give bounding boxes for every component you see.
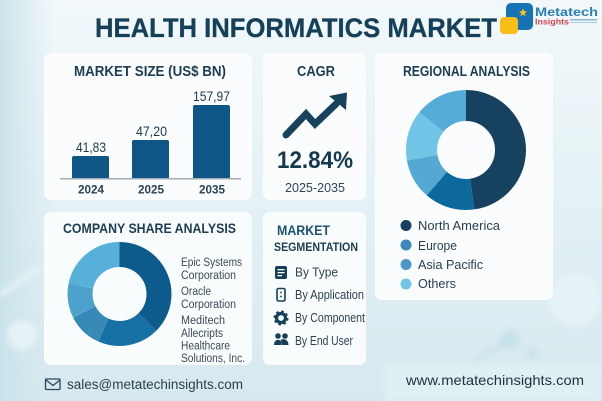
icon: by end user bbox=[274, 333, 288, 345]
label: by application: By Application bbox=[295, 288, 364, 302]
heading: CAGR: CAGR bbox=[297, 64, 335, 80]
icon: arrow head bbox=[329, 92, 347, 110]
legend: regions: Others bbox=[418, 276, 456, 291]
donut: regional analysis bbox=[422, 106, 510, 194]
bar chart: market size: 2025 bbox=[138, 184, 165, 196]
logo: Metatech Insights: Insights bbox=[535, 16, 569, 26]
label: by component: By Component bbox=[295, 311, 365, 325]
legend: companies: Meditech bbox=[181, 315, 225, 327]
legend: companies bbox=[181, 257, 245, 365]
legend: companies: Healthcare bbox=[181, 340, 230, 352]
panel: CAGR bbox=[263, 53, 366, 200]
panel: regional analysis bbox=[375, 53, 553, 300]
legend: companies: Solutions, Inc. bbox=[181, 353, 245, 365]
icon: rising arrow bbox=[286, 104, 336, 135]
label: by type: By Type bbox=[295, 266, 338, 280]
panel: company share analysis bbox=[44, 212, 252, 365]
legend: companies: Corporation bbox=[181, 270, 236, 282]
heading: market size: MARKET SIZE (US$ BN) bbox=[74, 64, 226, 80]
label: by end user: By End User bbox=[295, 334, 353, 348]
bar chart: market size: 2024 bbox=[78, 184, 105, 196]
legend: companies: Oracle bbox=[181, 286, 211, 298]
heading: regional analysis: REGIONAL ANALYSIS bbox=[403, 64, 530, 80]
logo: Metatech Insights: Metatech bbox=[535, 7, 598, 19]
heading: company share analysis: COMPANY SHARE ANALYSIS bbox=[63, 220, 236, 236]
title: HEALTH INFORMATICS MARKET bbox=[95, 13, 497, 43]
bar chart: market size: 47,20 bbox=[136, 124, 167, 139]
legend: companies: Allecripts bbox=[181, 328, 223, 340]
bar chart: market size bbox=[60, 89, 241, 196]
icon: email bbox=[46, 379, 60, 390]
panel: market size bbox=[44, 53, 252, 200]
heading: market segmentation: SEGMENTATION bbox=[274, 242, 358, 254]
bar chart: market size: 41,83 bbox=[76, 140, 106, 155]
CAGR value: 12.84% bbox=[277, 147, 353, 174]
legend: companies: Corporation bbox=[181, 299, 236, 311]
contact: email: sales@metatechinsights.com bbox=[67, 377, 243, 392]
legend: regions: Asia Pacific bbox=[418, 257, 483, 272]
heading: market segmentation: MARKET bbox=[277, 223, 331, 238]
icon: by application bbox=[277, 288, 285, 301]
panel: market segmentation bbox=[263, 212, 366, 365]
icon: by component bbox=[274, 312, 288, 324]
legend: companies: Epic Systems bbox=[181, 257, 242, 269]
icon: by type bbox=[275, 266, 287, 279]
legend: regions: North America bbox=[418, 218, 501, 233]
CAGR period: 2025-2035 bbox=[285, 181, 345, 195]
bar chart: market size: 2035 bbox=[199, 184, 226, 196]
bar chart: market size: 157,97 bbox=[193, 89, 230, 104]
donut: company share bbox=[80, 254, 159, 334]
heading: market segmentation bbox=[274, 223, 358, 254]
legend: regions: Europe bbox=[418, 238, 457, 253]
legend: regions bbox=[400, 218, 501, 291]
contact: website: www.metatechinsights.com bbox=[405, 372, 584, 388]
logo: Metatech Insights bbox=[500, 3, 598, 34]
